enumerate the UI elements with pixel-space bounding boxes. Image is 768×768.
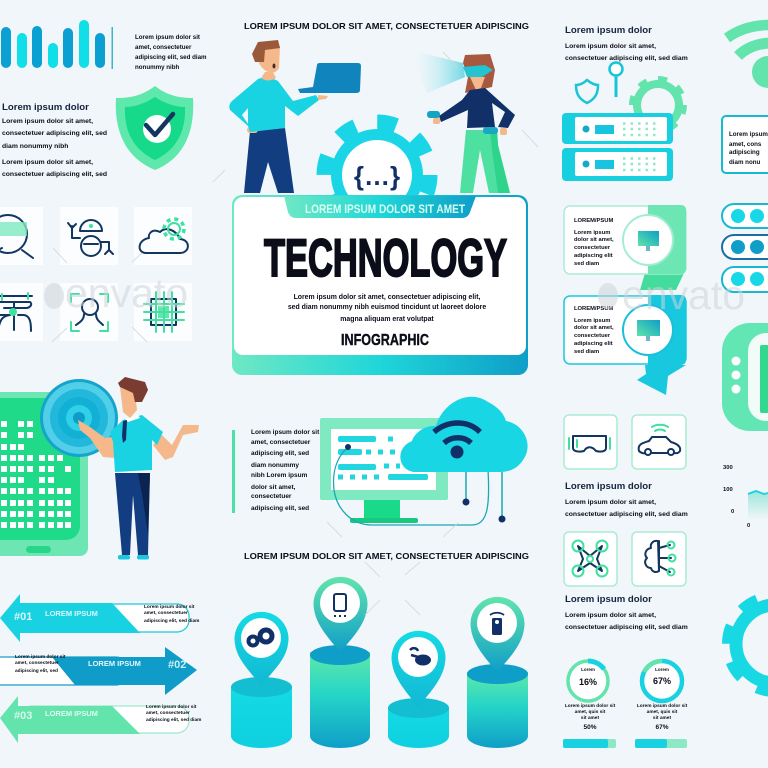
icon: gear bottom right [727,596,768,692]
text block: chart caption: Lorem ipsum dolor sit [135,34,200,41]
title: technology: TECHNOLOGY [264,229,507,288]
text block: right top: Lorem ipsum dolor [565,25,652,36]
text block: right top: consectetuer adipiscing elit, sed diam [565,55,688,62]
panel: microchip icon card [134,283,192,341]
arrow banner: 03: amet, consectetuer [146,710,190,716]
text block: left shield description: Lorem ipsum dolor sit amet, [2,118,93,125]
heading: top centre: LOREM IPSUM DOLOR SIT AMET, CONSECTETUER ADIPISCING [244,21,529,31]
icon: central gear with code braces: {…} [354,161,400,191]
text block: icons caption 2: Lorem ipsum dolor sit amet, [565,612,656,619]
area chart: right edge: 0 [731,509,734,515]
panel: green speech card: Lorem ipsum [574,230,610,236]
icon: wifi top right [727,25,768,88]
panel: VR face icon card [0,207,43,265]
illustration: monitor [320,418,489,525]
donut chart: 16 percent: 16% [579,677,597,687]
arrow banner: 03 [0,696,201,743]
text block: main description: sed diam nonummy nibh euismod tincidunt ut laoreet dolore [288,304,486,311]
area chart: right edge: 100 [723,487,733,493]
text block: chart caption [135,34,207,71]
icon card: AI brain [632,532,686,586]
pill toggles: right edge [722,204,768,292]
text block: chart caption: adipiscing elit, sed diam [135,54,207,61]
panel: right edge text box: Lorem ipsum [729,131,768,138]
title tab [284,196,476,218]
donut chart: 67 percent [642,661,682,701]
text block: chart caption: nonummy nibh [135,64,180,71]
panel: green speech card [564,205,686,290]
panel: right edge text box: adipiscing [729,149,760,156]
panel: right edge text box [722,116,768,173]
illustration: woman with VR headset [410,50,515,193]
text block: left shield description [2,102,107,178]
text block: icons caption 2 [565,594,688,631]
title tab: LOREM IPSUM DOLOR SIT AMET [305,202,466,216]
area chart: right edge: 300 [723,465,733,471]
cylinder: 1 with gears pin [231,612,292,748]
panel: drone icon card [0,283,43,341]
text block: icons caption 1: Lorem ipsum dolor [565,481,652,492]
panel: green speech card: dolor sit amet, [574,237,614,243]
text block: donut captions and progress bars [563,703,688,748]
text block: monitor description: Lorem ipsum dolor sit [251,429,320,436]
panel: blue speech card [564,295,686,395]
text block: monitor description: amet, consectetuer [251,439,311,446]
panel: blue speech card: LOREM/PSUM [574,306,613,312]
icon: security shield [116,86,193,170]
text block: main description [288,294,486,323]
heading: bottom centre: LOREM IPSUM DOLOR SIT AMET, CONSECTETUER ADIPISCING [244,551,529,561]
panel: green speech card: consectetuer [574,245,611,251]
arrow banner: 02: adipiscing elit, sed [15,668,58,674]
text block: left shield description: Lorem ipsum dolor [2,102,89,113]
text block: monitor description: adipiscing elit, sed [251,505,309,512]
panel: face scan icon card [60,283,118,341]
icon: server rack lower [562,148,673,181]
text block: right top: Lorem ipsum dolor sit amet, [565,43,656,50]
watermark: envato right: envato [622,272,745,318]
text block: icons caption 2: Lorem ipsum dolor [565,594,652,605]
arrow banner: 03: #03 [14,710,32,722]
panel: robot icon card [60,207,118,265]
text block: donut captions and progress bars: 50% [583,724,597,731]
arrow banner: 02: #02 [168,659,186,671]
text block: left shield description: consectetuer adipiscing elit, sed [2,130,107,137]
text block: icons caption 2: consectetuer adipiscing elit, sed diam [565,624,688,631]
donut chart: 16 percent [568,661,608,701]
cylinder: 3 with touch pin [388,631,449,748]
panel: main title card [232,195,528,375]
bar chart: top left [1,20,113,69]
icon: touch target rings [40,379,118,457]
cylinder: 2 with phone pin [310,577,370,748]
text block: monitor description: adipiscing elit, sed [251,450,309,457]
panel: right edge text box: diam nonu [729,159,760,166]
arrow banner: 02: LOREM IPSUM [88,659,141,668]
illustration: tablet [0,392,88,556]
icon: laptop [298,63,361,93]
text block: right top [565,25,688,62]
panel: blue speech card: adipiscing elit [574,341,613,347]
panel: blue speech card: Lorem ipsum [574,318,610,324]
text block: donut captions and progress bars: sit amet [581,715,599,721]
arrow banner: 01: LOREM IPSUM [45,609,98,618]
subtitle: infographic: INFOGRAPHIC [341,332,429,349]
icon: server rack upper [562,113,673,144]
text block: monitor description: diam nonummy [251,462,299,469]
arrow banner: 01: #01 [14,611,32,623]
area chart: right edge: 0 [747,523,750,529]
text block: donut captions and progress bars: sit amet [653,715,671,721]
donut chart: 67 percent: 67% [653,676,671,686]
text block: icons caption 1 [565,481,688,518]
cylinder: 4 with remote pin [467,597,528,748]
illustration: presenting man [78,377,199,560]
arrow banner: 03: Lorem ipsum dolor sit [146,704,197,710]
icon card: connected car [632,415,686,469]
arrow banner: 02: amet, consectetuer [15,660,59,666]
arrow banner: 03: adipiscing elit, sed diam [146,717,201,723]
arrow banner: 01 [0,594,199,642]
icons: shield, key and gear above servers [576,62,684,131]
text block: monitor description: nibh Lorem ipsum [251,472,308,479]
icon: smartwatch [722,323,768,431]
donut chart: 67 percent: Lorem [655,667,669,672]
panel: right edge text box: amet, cons [729,141,762,148]
text block: monitor description: dolor sit amet, [251,484,296,491]
panel: blue speech card: consectetuer [574,333,611,339]
text block: left shield description: consectetuer adipiscing elit, sed [2,171,107,178]
icon card: VR goggles [564,415,617,469]
text block: icons caption 1: Lorem ipsum dolor sit amet, [565,499,656,506]
arrow banner: 02 [0,647,197,695]
text block: donut captions and progress bars: amet, quis sit [647,709,678,715]
arrow banner: 03: LOREM IPSUM [45,709,98,718]
panel: blue speech card: dolor sit amet, [574,325,614,331]
text block: monitor description: consectetuer [251,493,292,500]
watermark: envato left: envato [65,270,188,316]
icon card: drone [564,532,617,586]
text block: donut captions and progress bars: amet, quis sit [575,709,606,715]
text block: chart caption: amet, consectetuer [135,44,192,51]
panel: green speech card: LOREM/PSUM [574,218,613,224]
donut chart: 16 percent: Lorem [581,667,595,672]
arrow banner: 01: Lorem ipsum dolor sit [144,604,195,610]
text block: donut captions and progress bars: 67% [655,724,669,731]
panel: cloud gear icon card [134,207,192,265]
text block: icons caption 1: consectetuer adipiscing elit, sed diam [565,511,688,518]
area chart: right edge [723,465,768,529]
text block: left shield description: Lorem ipsum dolor sit amet, [2,159,93,166]
panel: green speech card: sed diam [574,261,599,267]
panel: blue speech card: sed diam [574,349,599,355]
text block: main description: Lorem ipsum dolor sit amet, consectetuer adipiscing elit, [294,294,481,301]
text block: main description: magna aliquam erat volutpat [340,316,434,323]
arrow banner: 01: amet, consectetuer [144,610,188,616]
text block: monitor description [232,429,320,513]
illustration: man with laptop [229,40,328,193]
arrow banner: 01: adipiscing elit, sed diam [144,618,199,624]
arrow banner: 02: Lorem ipsum dolor sit [15,654,66,660]
text block: donut captions and progress bars: Lorem ipsum dolor sit [565,703,616,709]
icon: central gear with code braces [325,123,429,227]
panel: green speech card: adipiscing elit [574,253,613,259]
text block: donut captions and progress bars: Lorem ipsum dolor sit [637,703,688,709]
text block: left shield description: diam nonummy nibh [2,143,68,150]
icon: wifi cloud [400,397,528,522]
